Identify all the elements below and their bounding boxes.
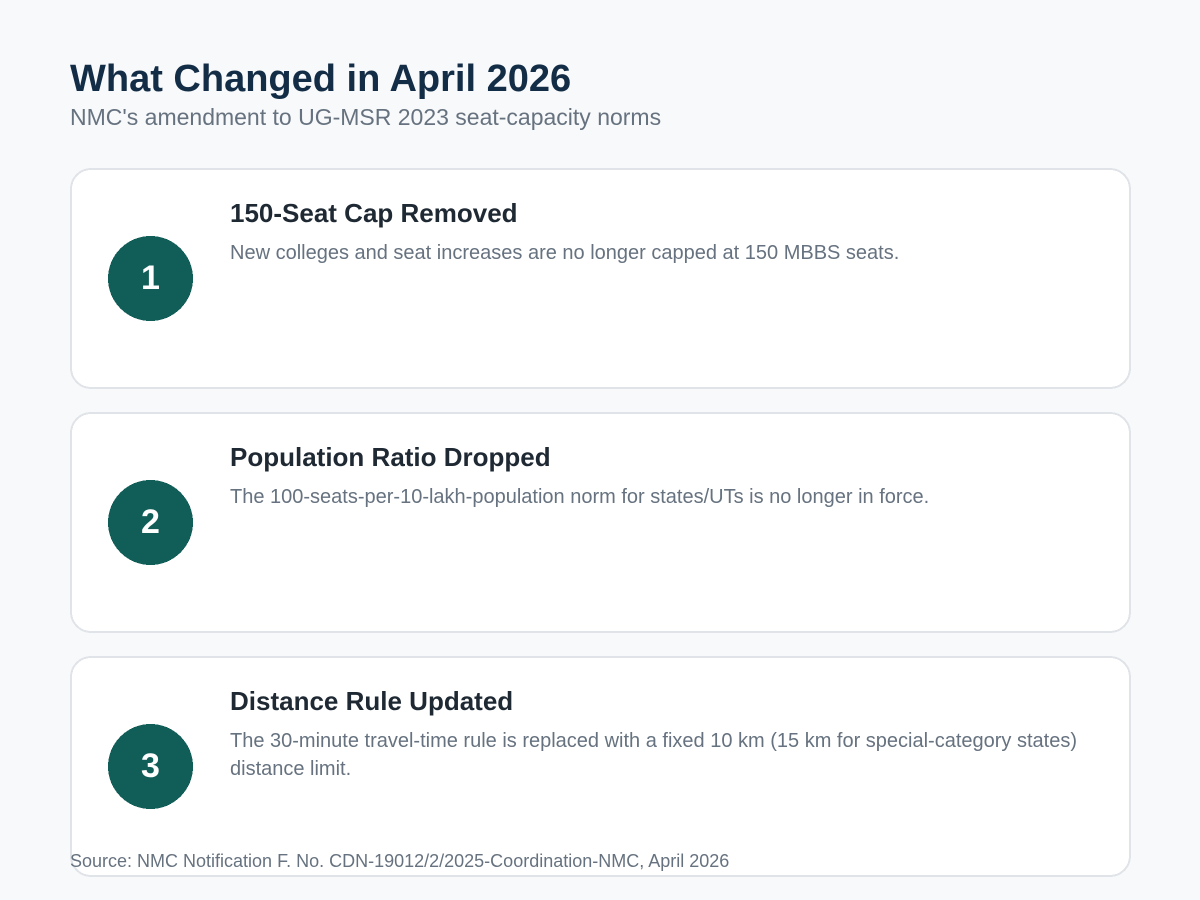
- panel: change 1: [71, 169, 1130, 388]
- badge: number 3: 3: [141, 747, 160, 785]
- badge: number 2: 2: [141, 503, 160, 541]
- panel: change 3: [71, 657, 1130, 876]
- text: change 1: New colleges and seat increases are no longer capped at 150 MBBS seats.: [230, 242, 899, 264]
- title: What Changed in April 2026: [70, 58, 571, 100]
- badge: number 2: [108, 480, 193, 565]
- heading: change 3: Distance Rule Updated: [230, 686, 513, 716]
- heading: change 2: Population Ratio Dropped: [230, 442, 551, 472]
- badge: number 1: 1: [141, 259, 160, 297]
- text: change 2: The 100-seats-per-10-lakh-population norm for states/UTs is no longer in force.: [230, 486, 929, 508]
- source note: Source: NMC Notification F. No. CDN-19012/2/2025-Coordination-NMC, April 2026: [70, 851, 729, 871]
- text: change 3: distance limit.: [230, 758, 351, 780]
- text: change 3: The 30-minute travel-time rule is replaced with a fixed 10 km (15 km for special-category states): [230, 730, 1077, 752]
- badge: number 1: [108, 236, 193, 321]
- panel: change 2: [71, 413, 1130, 632]
- badge: number 3: [108, 724, 193, 809]
- subtitle: NMC's amendment to UG-MSR 2023 seat-capacity norms: [70, 104, 661, 130]
- text: change 3: [230, 730, 1077, 780]
- heading: change 1: 150-Seat Cap Removed: [230, 198, 518, 228]
